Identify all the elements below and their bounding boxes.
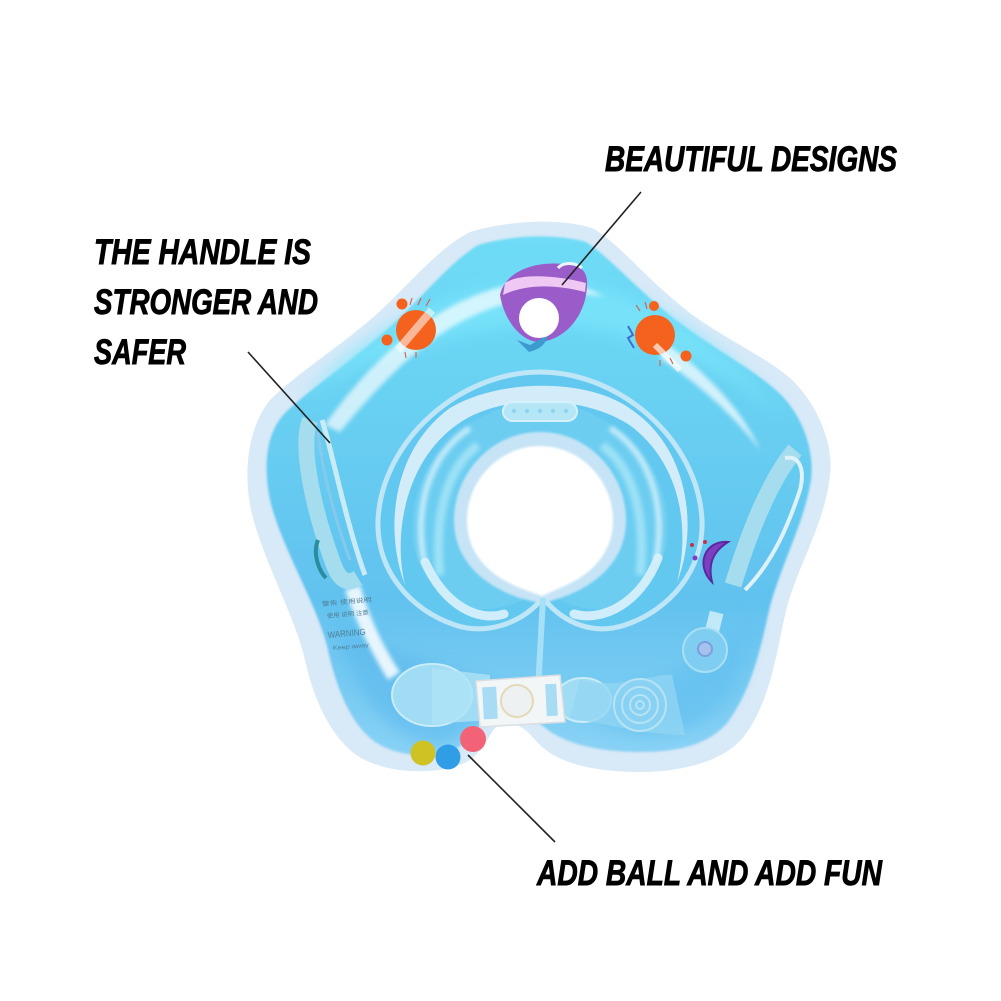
label: the handle is stronger and safer: SAFER	[94, 333, 187, 372]
neck ring	[378, 372, 702, 629]
left warning label: 警告 使用说明	[321, 596, 372, 608]
blue ball	[436, 744, 460, 770]
pink ball	[460, 726, 486, 752]
left warning label: 使用 说明 注意	[326, 608, 369, 620]
left warning label	[321, 596, 372, 652]
label: beautiful designs: BEAUTIFUL DESIGNS	[605, 140, 897, 179]
strap and buckle	[392, 664, 685, 735]
label: the handle is stronger and safer: THE HANDLE IS	[94, 233, 311, 272]
left handle	[306, 420, 365, 581]
white highlight left arc	[325, 281, 605, 432]
neck opening seam	[538, 598, 543, 690]
float product illustration	[247, 222, 831, 772]
right strap disc	[555, 678, 611, 722]
ring breathing holes	[503, 402, 577, 421]
neck hole edge	[454, 432, 626, 604]
ring outer tube	[378, 372, 702, 629]
label: the handle is stronger and safer: STRONGER AND	[94, 283, 318, 322]
callout line: handle	[248, 352, 330, 443]
buckle	[476, 675, 565, 727]
left strap disc	[392, 664, 472, 726]
ring pale band	[394, 386, 688, 585]
yellow ball	[410, 740, 436, 766]
neck hole	[467, 446, 613, 596]
ring inner tube	[412, 402, 668, 609]
white highlight right arc	[660, 345, 760, 450]
air valve	[683, 628, 727, 672]
left warning label: Keep away	[333, 643, 369, 652]
right moon print	[690, 540, 728, 582]
lower body shade	[335, 620, 510, 745]
upper body sheen	[300, 280, 790, 420]
left warning label: WARNING	[327, 627, 366, 640]
right lower sheen patch	[703, 611, 723, 643]
callout line: beautiful designs	[562, 192, 641, 285]
left moon print	[316, 540, 326, 578]
ring soft bands	[421, 428, 659, 560]
right crab print	[628, 301, 692, 370]
callout line: balls	[468, 755, 555, 842]
left crab print	[382, 298, 436, 358]
highlight lower left	[345, 585, 400, 680]
right handle	[733, 450, 802, 590]
label: add ball and add fun: ADD BALL AND ADD FUN	[536, 854, 883, 893]
right strap band	[570, 675, 685, 735]
inflated body	[267, 236, 812, 755]
ring lower right arm	[574, 558, 658, 616]
whale print	[500, 264, 587, 352]
ring lower left arm	[425, 562, 504, 616]
concentric button	[614, 679, 666, 731]
balls	[410, 726, 486, 770]
label: the handle is stronger and safer	[94, 233, 318, 372]
outer pale rim	[247, 222, 831, 772]
